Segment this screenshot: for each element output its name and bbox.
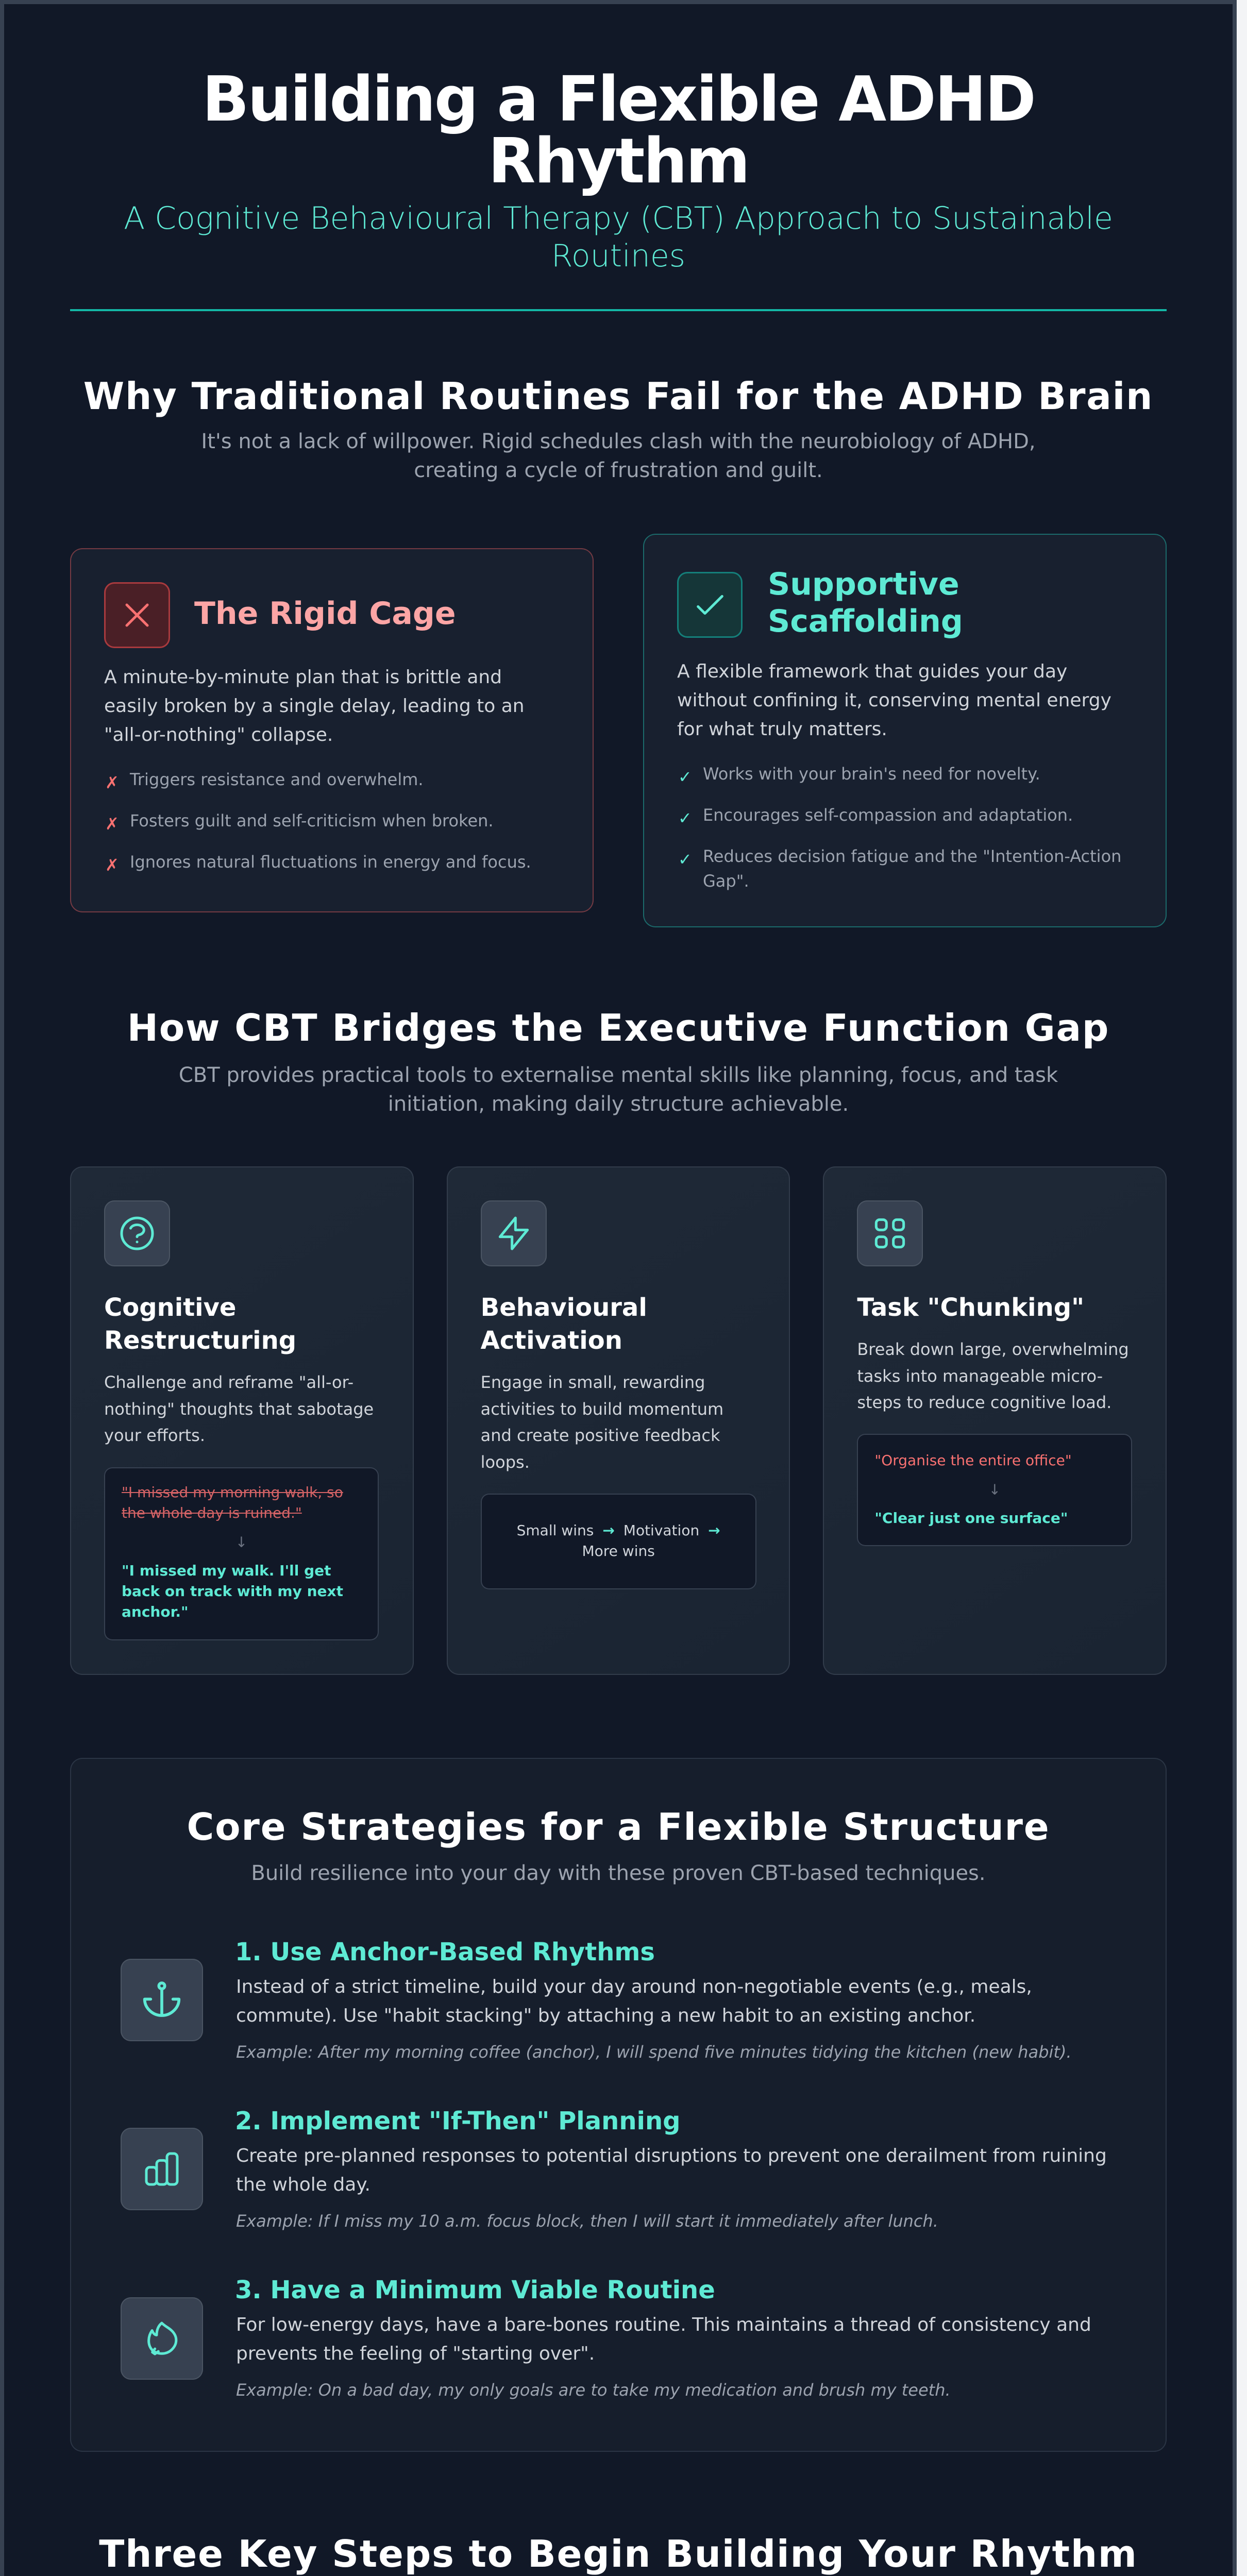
text: small wins loop: Small wins → Motivation → bbox=[517, 1522, 720, 1539]
icon: question circle bbox=[104, 1200, 170, 1266]
text: benefit 3: Gap". bbox=[703, 871, 749, 891]
text: strategies intro: Build resilience into your day with these proven CBT-based techniques. bbox=[251, 1861, 986, 1885]
strategy 1 text: commute). Use "habit stacking" by attaching a new habit to an existing anchor. bbox=[236, 2005, 975, 2026]
subtitle: Routines bbox=[551, 238, 685, 274]
text: reframed thought: anchor." bbox=[122, 1603, 189, 1620]
text: reframed thought: back on track with my next bbox=[122, 1583, 343, 1600]
heading: task chunking: Task "Chunking" bbox=[857, 1293, 1084, 1322]
text: activation description bbox=[481, 1372, 723, 1472]
text: benefit 3: Reduces decision fatigue and the "Intention-Action bbox=[703, 846, 1121, 866]
panel: the rigid cage bbox=[70, 548, 594, 912]
panel: cognitive restructuring bbox=[70, 1166, 414, 1675]
mark: cross 2: ✗ bbox=[105, 814, 119, 834]
text: why routines fail intro: It's not a lack of willpower. Rigid schedules clash with the neurobiology of ADHD, bbox=[201, 430, 1036, 453]
text: small task: "Clear just one surface" bbox=[874, 1510, 1068, 1527]
text: scaffolding description: without confining it, conserving mental energy bbox=[677, 689, 1111, 711]
mark: cross 3: ✗ bbox=[105, 855, 119, 875]
text: chunking description: Break down large, overwhelming bbox=[857, 1340, 1129, 1359]
heading: behavioural activation bbox=[480, 1293, 647, 1355]
text: rigid cage description bbox=[104, 667, 525, 745]
list: rigid cage drawbacks bbox=[105, 770, 531, 875]
icon: anchor bbox=[121, 1959, 203, 2041]
icon: bar chart bbox=[121, 2128, 203, 2210]
text: restructuring description: your efforts. bbox=[104, 1426, 205, 1445]
heading: three key steps: Three Key Steps to Begin Building Your Rhythm bbox=[99, 2532, 1138, 2575]
text: benefit 1: Works with your brain's need for novelty. bbox=[703, 764, 1040, 784]
arrow: down: ↓ bbox=[989, 1481, 1001, 1498]
text: chunking description: steps to reduce cognitive load. bbox=[857, 1393, 1111, 1412]
callout: task example bbox=[857, 1434, 1132, 1546]
heading: supportive scaffolding: Scaffolding bbox=[768, 603, 963, 639]
text: reframed thought bbox=[122, 1562, 343, 1620]
strategy 1 heading: 1. Use Anchor-Based Rhythms bbox=[235, 1938, 655, 1967]
arrow: down: ↓ bbox=[235, 1534, 247, 1551]
strategy 2 heading: 2. Implement "If-Then" Planning bbox=[235, 2107, 680, 2136]
text: cbt intro: CBT provides practical tools to externalise mental skills like planning, focus, and task bbox=[179, 1063, 1058, 1087]
text: scaffolding description: for what truly matters. bbox=[677, 718, 887, 740]
mark: check 3: ✓ bbox=[678, 850, 692, 869]
text: drawback 3: Ignores natural fluctuations in energy and focus. bbox=[130, 852, 531, 872]
title: Rhythm bbox=[488, 126, 749, 197]
heading: cognitive restructuring bbox=[104, 1293, 296, 1355]
mark: check 2: ✓ bbox=[678, 808, 692, 828]
text: why routines fail intro: creating a cycle of frustration and guilt. bbox=[414, 459, 823, 482]
text: restructuring description: Challenge and reframe "all-or- bbox=[104, 1372, 353, 1392]
strategy 3 text bbox=[236, 2314, 1091, 2364]
text: reframed thought: "I missed my walk. I'll get bbox=[122, 1562, 331, 1579]
title bbox=[202, 64, 1035, 197]
text: benefit 3 bbox=[703, 846, 1121, 891]
text: activation description: activities to build momentum bbox=[481, 1399, 723, 1419]
heading: supportive scaffolding bbox=[768, 566, 963, 639]
text: rigid cage description: easily broken by a single delay, leading to an bbox=[104, 696, 525, 716]
text: unhelpful thought: "I missed my morning walk, so bbox=[122, 1484, 343, 1501]
text: rigid cage description: "all-or-nothing" collapse. bbox=[104, 724, 333, 745]
text: cbt intro: initiation, making daily structure achievable. bbox=[388, 1092, 849, 1116]
strategy 2 text: the whole day. bbox=[236, 2174, 370, 2195]
text: chunking description: tasks into manageable micro- bbox=[857, 1366, 1103, 1386]
heading: how cbt bridges: How CBT Bridges the Executive Function Gap bbox=[127, 1006, 1109, 1049]
strategy 3 heading: 3. Have a Minimum Viable Routine bbox=[235, 2276, 715, 2304]
text: scaffolding description: A flexible framework that guides your day bbox=[677, 660, 1067, 682]
panel: task chunking bbox=[823, 1166, 1167, 1675]
text: drawback 1: Triggers resistance and overwhelm. bbox=[130, 770, 424, 789]
panel: supportive scaffolding bbox=[643, 534, 1167, 927]
strategy 2 text bbox=[236, 2145, 1107, 2195]
text: cbt intro bbox=[179, 1063, 1058, 1116]
strategy 1 text bbox=[236, 1976, 1032, 2026]
strategy 3 example: Example: On a bad day, my only goals are to take my medication and brush my teeth. bbox=[236, 2380, 951, 2400]
strategy 1 text: Instead of a strict timeline, build your day around non-negotiable events (e.g., meals, bbox=[236, 1976, 1032, 1997]
text: why routines fail intro bbox=[201, 430, 1036, 482]
text: unhelpful thought bbox=[122, 1484, 343, 1521]
icon: lightning bolt bbox=[481, 1200, 547, 1266]
text: rigid cage description: A minute-by-minute plan that is brittle and bbox=[104, 667, 502, 687]
heading: behavioural activation: Behavioural bbox=[481, 1293, 647, 1322]
heading: behavioural activation: Activation bbox=[481, 1326, 622, 1355]
heading: the rigid cage: The Rigid Cage bbox=[194, 596, 456, 632]
text: benefit 2: Encourages self-compassion and adaptation. bbox=[703, 805, 1073, 825]
strategy 2 example: Example: If I miss my 10 a.m. focus block, then I will start it immediately after lunch. bbox=[236, 2211, 938, 2231]
icon: check bbox=[677, 572, 743, 638]
icon: grid bbox=[857, 1200, 923, 1266]
heading: cognitive restructuring: Cognitive bbox=[104, 1293, 236, 1322]
callout: feedback loop bbox=[481, 1494, 756, 1589]
text: activation description: Engage in small, rewarding bbox=[481, 1372, 705, 1392]
panel: behavioural activation bbox=[447, 1166, 790, 1675]
text: chunking description bbox=[857, 1340, 1129, 1412]
heading: why traditional routines fail: Why Traditional Routines Fail for the ADHD Brain bbox=[83, 375, 1153, 418]
text: drawback 2: Fosters guilt and self-criticism when broken. bbox=[130, 811, 494, 831]
subtitle bbox=[124, 200, 1113, 274]
strategy 3 text: For low-energy days, have a bare-bones routine. This maintains a thread of consistency and bbox=[236, 2314, 1091, 2335]
text: restructuring description: nothing" thoughts that sabotage bbox=[104, 1399, 374, 1419]
icon: cross bbox=[104, 582, 170, 648]
strategy 3 text: prevents the feeling of "starting over". bbox=[236, 2343, 595, 2364]
panel: core strategies bbox=[70, 1758, 1167, 2452]
subtitle: A Cognitive Behavioural Therapy (CBT) Approach to Sustainable bbox=[124, 200, 1113, 236]
text: restructuring description bbox=[104, 1372, 374, 1445]
strategy 2 text: Create pre-planned responses to potential disruptions to prevent one derailment from ruining bbox=[236, 2145, 1107, 2166]
callout: thought reframe bbox=[104, 1467, 379, 1640]
text: activation description: loops. bbox=[481, 1452, 530, 1472]
text: activation description: and create positive feedback bbox=[481, 1426, 720, 1445]
icon: flame bbox=[121, 2297, 203, 2380]
heading: core strategies: Core Strategies for a Flexible Structure bbox=[187, 1805, 1050, 1849]
text: small wins loop: More wins bbox=[582, 1543, 655, 1560]
heading: supportive scaffolding: Supportive bbox=[768, 566, 959, 602]
text: scaffolding description bbox=[677, 660, 1111, 740]
mark: cross 1: ✗ bbox=[105, 773, 119, 792]
list: scaffolding benefits bbox=[678, 764, 1121, 891]
title: Building a Flexible ADHD bbox=[202, 64, 1035, 135]
text: unhelpful thought: the whole day is ruined." bbox=[122, 1504, 302, 1521]
text: big task: "Organise the entire office" bbox=[874, 1452, 1072, 1469]
text: small wins loop bbox=[517, 1522, 720, 1560]
mark: check 1: ✓ bbox=[678, 767, 692, 787]
heading: cognitive restructuring: Restructuring bbox=[104, 1326, 296, 1355]
strategy 1 example: Example: After my morning coffee (anchor), I will spend five minutes tidying the kitchen (new habit). bbox=[236, 2042, 1072, 2062]
